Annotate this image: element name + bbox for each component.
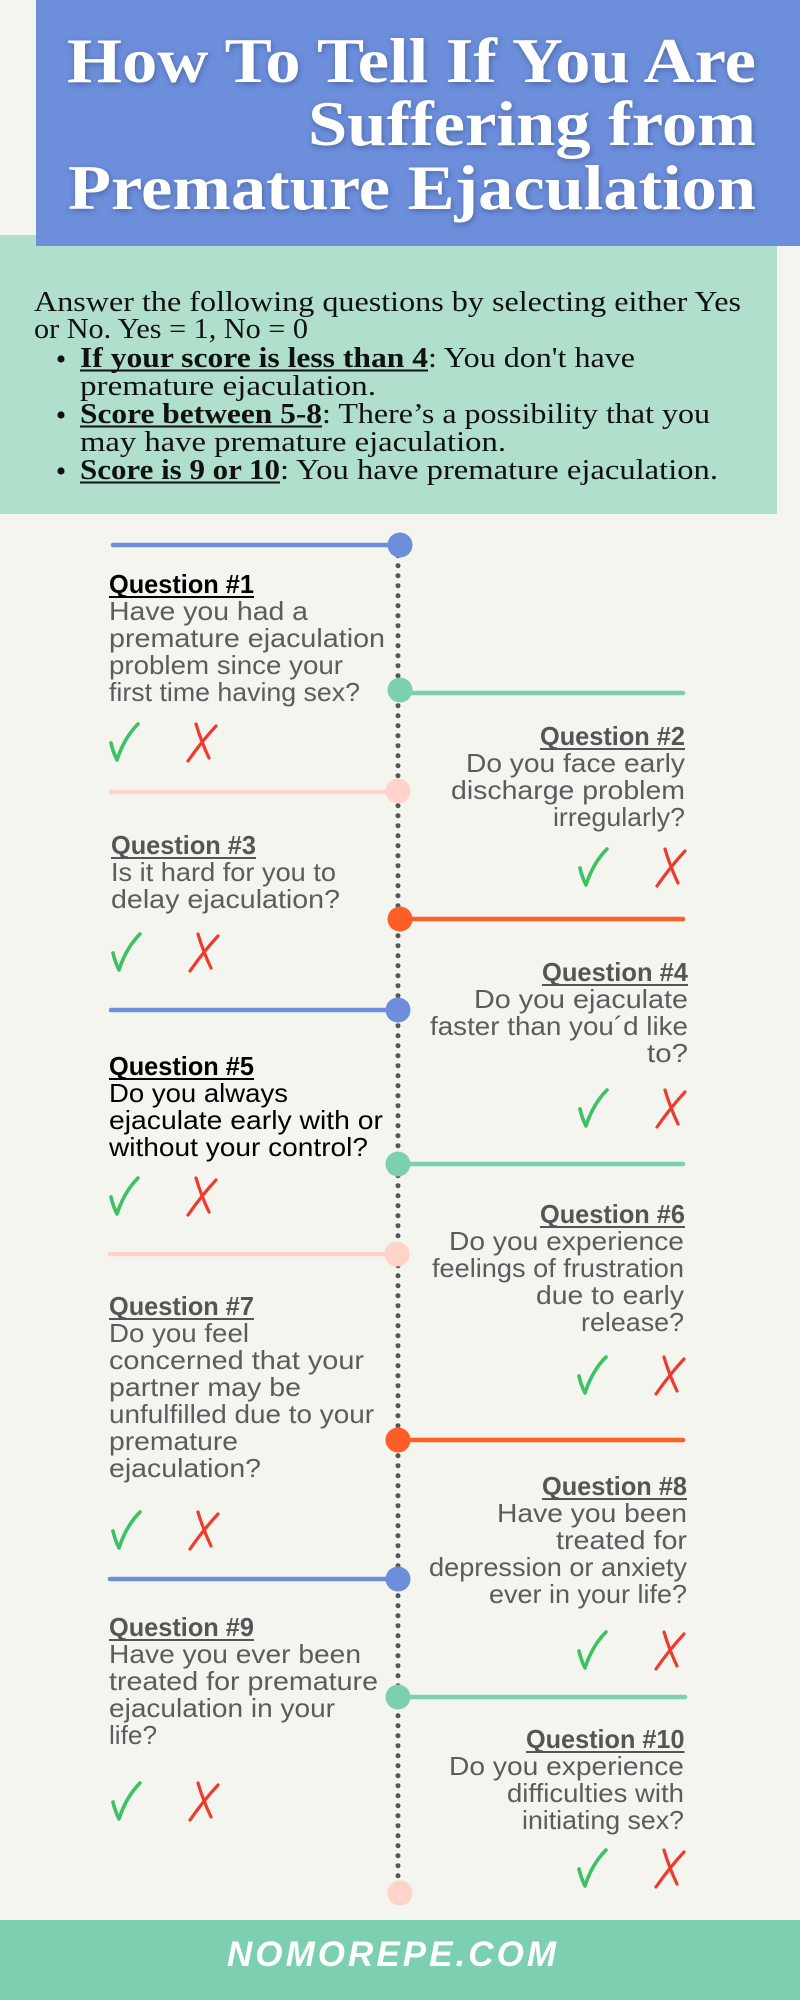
question 3: delay ejaculation?: [111, 884, 340, 914]
question 6: [432, 1199, 685, 1394]
question 7: Question #7: [109, 1291, 254, 1321]
question 2: Do you face early: [466, 748, 685, 778]
question 5: [108, 1051, 383, 1215]
title: Suffering from: [308, 88, 756, 159]
icons: yes and no: [113, 934, 218, 971]
question 7: ejaculation?: [109, 1453, 261, 1483]
timeline node 8: orange: [386, 1428, 683, 1452]
score rule: 9 or 10: Score is 9 or 10: [80, 455, 280, 486]
question 5: without your control?: [108, 1132, 368, 1162]
score rule: between 5-8: [57, 399, 710, 458]
question 3: [111, 830, 340, 971]
question 1: [109, 569, 385, 761]
question 9: Question #9: [109, 1612, 254, 1642]
question 7: Do you feel: [109, 1318, 249, 1348]
question 3: Is it hard for you to: [111, 857, 336, 887]
question 1: problem since your: [109, 650, 343, 680]
question 10: Do you experience: [449, 1751, 684, 1781]
question 9: treated for premature: [109, 1666, 378, 1696]
question 5: Do you always: [109, 1078, 288, 1108]
intro text: Answer the following questions by selecting either Yes: [34, 287, 741, 318]
icons: yes and no: [579, 1632, 684, 1669]
timeline end node: pink: [388, 1880, 412, 1906]
score rule: 9 or 10: [57, 455, 718, 486]
question 4: [430, 957, 689, 1127]
question 1: premature ejaculation: [109, 623, 385, 653]
score rule: less than 4: : You don't have: [428, 343, 635, 374]
timeline node 3: pink: [111, 778, 410, 804]
timeline: dotted spine: [396, 556, 400, 1878]
question 7: premature: [109, 1426, 238, 1456]
question 9: ejaculation in your: [109, 1693, 335, 1723]
question 8: treated for: [556, 1525, 687, 1555]
score rule: between 5-8: may have premature ejaculation.: [80, 427, 506, 458]
question 6: feelings of frustration: [432, 1253, 684, 1283]
panel: title banner: [36, 0, 800, 246]
question 1: Question #1: [109, 569, 254, 599]
icons: yes and no: [579, 1357, 684, 1394]
intro text: or No. Yes = 1, No = 0: [34, 314, 308, 345]
question 4: to?: [647, 1038, 688, 1068]
title: How To Tell If You Are: [67, 25, 756, 96]
question 6: release?: [581, 1307, 684, 1337]
intro text: [34, 287, 741, 345]
question 7: concerned that your: [109, 1345, 364, 1375]
question 7: [109, 1291, 374, 1549]
question 9: life?: [109, 1720, 157, 1750]
question 5: Question #5: [109, 1051, 254, 1081]
score rule: less than 4: premature ejaculation.: [80, 371, 376, 402]
question 2: discharge problem: [451, 775, 685, 805]
footer band: [0, 1920, 800, 2000]
score rule: between 5-8: : There’s a possibility that you: [322, 399, 710, 430]
icons: yes and no: [111, 724, 216, 761]
question 6: Question #6: [540, 1199, 685, 1229]
question 1: first time having sex?: [109, 677, 360, 707]
question 9: Have you ever been: [109, 1639, 361, 1669]
question 6: due to early: [536, 1280, 684, 1310]
question 4: Question #4: [542, 957, 689, 987]
question 8: ever in your life?: [489, 1579, 687, 1609]
footer website text: NOMOREPE.COM: [227, 1935, 557, 1974]
question 8: depression or anxiety: [429, 1552, 687, 1582]
timeline node 1: blue: [113, 532, 412, 558]
question 2: Question #2: [540, 721, 685, 751]
icons: yes and no: [580, 849, 685, 886]
score rule: 9 or 10: : You have premature ejaculation.: [280, 455, 718, 486]
question 2: irregularly?: [553, 802, 685, 832]
question 10: Question #10: [526, 1724, 684, 1754]
question 7: partner may be: [109, 1372, 301, 1402]
icons: yes and no: [113, 1783, 218, 1820]
timeline node 7: pink: [110, 1242, 410, 1266]
score rule: less than 4: If your score is less than 4: [80, 343, 428, 374]
timeline node 4: orange: [388, 906, 683, 932]
question 6: Do you experience: [449, 1226, 684, 1256]
question 10: initiating sex?: [522, 1805, 684, 1835]
question 4: faster than you´d like: [430, 1011, 688, 1041]
timeline node 5: blue: [111, 998, 410, 1022]
title: Premature Ejaculation: [68, 152, 756, 223]
question 8: [429, 1471, 687, 1669]
question 5: ejaculate early with or: [109, 1105, 383, 1135]
question 10: difficulties with: [507, 1778, 684, 1808]
icons: yes and no: [580, 1090, 685, 1127]
question 1: Have you had a: [109, 596, 309, 626]
icons: yes and no: [113, 1512, 218, 1549]
score rule: between 5-8: Score between 5-8: [80, 399, 322, 430]
timeline node 9: blue: [110, 1566, 410, 1592]
title: [67, 25, 756, 223]
score rule: less than 4: [57, 343, 635, 402]
timeline node 2: green: [388, 678, 683, 702]
question 10: [449, 1724, 684, 1887]
question 4: Do you ejaculate: [474, 984, 688, 1014]
question 7: unfulfilled due to your: [109, 1399, 374, 1429]
question 9: [109, 1612, 378, 1820]
timeline node 6: green: [386, 1152, 683, 1176]
panel: intro instructions: [0, 235, 777, 514]
question 8: Have you been: [497, 1498, 687, 1528]
icons: yes and no: [579, 1850, 684, 1887]
question 2: [451, 721, 685, 886]
question 3: Question #3: [111, 830, 256, 860]
question 8: Question #8: [542, 1471, 687, 1501]
icons: yes and no: [111, 1178, 216, 1215]
timeline node 10: green: [386, 1684, 685, 1710]
